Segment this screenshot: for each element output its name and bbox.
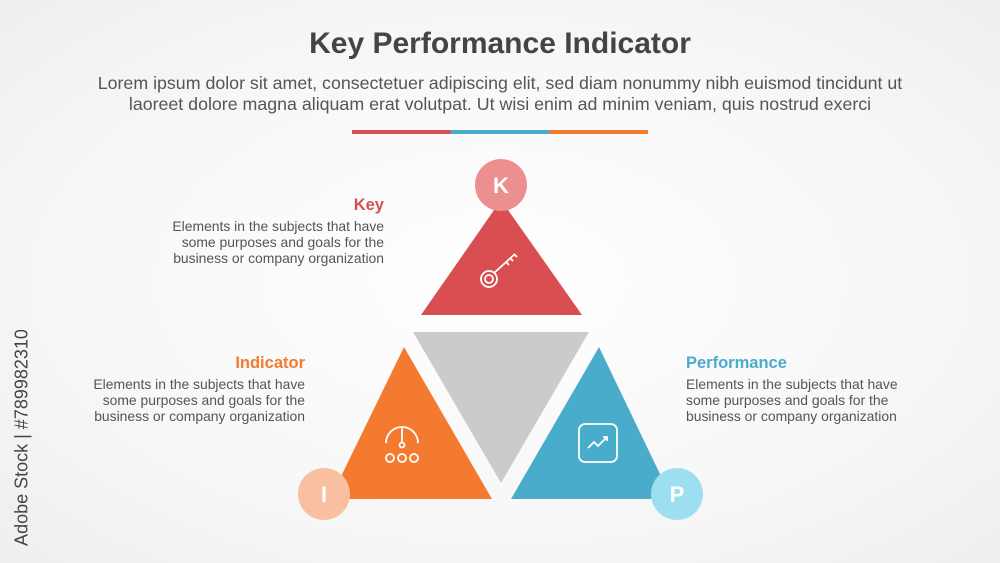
text: indicator: Elements in the subjects that have bbox=[93, 376, 305, 392]
icon: gauge bbox=[386, 427, 418, 462]
triangle: key bbox=[421, 200, 582, 315]
text: key: business or company organization bbox=[173, 250, 384, 266]
text: indicator: some purposes and goals for the bbox=[103, 392, 305, 408]
text: performance: business or company organization bbox=[686, 408, 897, 424]
subtitle: laoreet dolore magna aliquam erat volutpat. Ut wisi enim ad minim veniam, quis nostrud exerci bbox=[129, 94, 871, 114]
text: key: Key bbox=[354, 196, 384, 214]
text: key: some purposes and goals for the bbox=[182, 234, 384, 250]
text: performance: some purposes and goals for the bbox=[686, 392, 888, 408]
divider bar bbox=[352, 130, 648, 134]
text: performance: Performance bbox=[686, 354, 787, 372]
triangle: center gray bbox=[413, 332, 589, 483]
circle K: K bbox=[493, 173, 509, 198]
watermark side text: Adobe Stock | #789982310 bbox=[12, 329, 32, 546]
text: performance bbox=[686, 354, 898, 424]
circle P bbox=[651, 468, 703, 520]
text: performance: Elements in the subjects that have bbox=[686, 376, 898, 392]
subtitle: Lorem ipsum dolor sit amet, consectetuer adipiscing elit, sed diam nonummy nibh euismod tincidunt ut bbox=[98, 73, 902, 93]
text: key bbox=[172, 196, 384, 266]
text: indicator: Indicator bbox=[235, 354, 305, 372]
circle I bbox=[298, 468, 350, 520]
text: indicator bbox=[93, 354, 305, 424]
triangle: indicator bbox=[330, 347, 492, 499]
circle P: P bbox=[670, 482, 684, 507]
subtitle bbox=[98, 73, 902, 114]
text: key: Elements in the subjects that have bbox=[172, 218, 384, 234]
circle I: I bbox=[321, 482, 327, 507]
title: Key Performance Indicator bbox=[309, 27, 691, 60]
circle K bbox=[475, 159, 527, 211]
icon: key bbox=[481, 254, 517, 287]
text: indicator: business or company organization bbox=[94, 408, 305, 424]
triangle: performance bbox=[511, 347, 672, 499]
icon: chart bbox=[579, 424, 617, 462]
